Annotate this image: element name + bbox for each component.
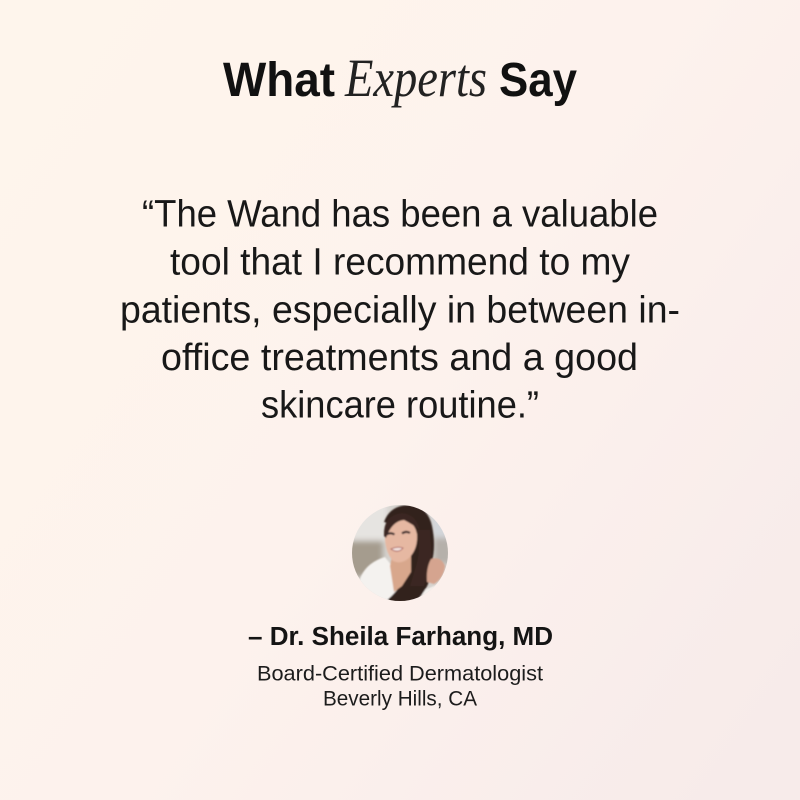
quote text: skincare routine.” — [261, 385, 539, 427]
smile — [391, 547, 403, 551]
attribution credentials — [257, 662, 543, 710]
side hair over face — [384, 513, 420, 538]
quote text: “The Wand has been a valuable — [142, 194, 658, 236]
attribution name: – Dr. Sheila Farhang, MD — [248, 623, 553, 651]
portrait figure — [360, 505, 446, 601]
title — [223, 48, 577, 108]
attribution credentials: Beverly Hills, CA — [323, 688, 477, 710]
neck and chest — [390, 552, 411, 592]
hair back — [382, 505, 434, 604]
face — [385, 518, 417, 562]
quote text — [120, 194, 680, 427]
eyes — [386, 532, 410, 534]
title: Experts — [344, 48, 487, 108]
infographic canvas — [122, 60, 678, 710]
quote text: tool that I recommend to my — [170, 242, 630, 284]
portrait: Dr. Sheila Farhang — [352, 505, 448, 601]
quote text: patients, especially in between in- — [120, 290, 680, 332]
hand — [427, 558, 445, 584]
quote text: office treatments and a good — [161, 337, 638, 379]
attribution credentials: Board-Certified Dermatologist — [257, 662, 543, 686]
portrait background — [352, 505, 448, 601]
title: Say — [499, 54, 577, 107]
shirt — [360, 556, 398, 600]
title: What — [223, 54, 335, 107]
